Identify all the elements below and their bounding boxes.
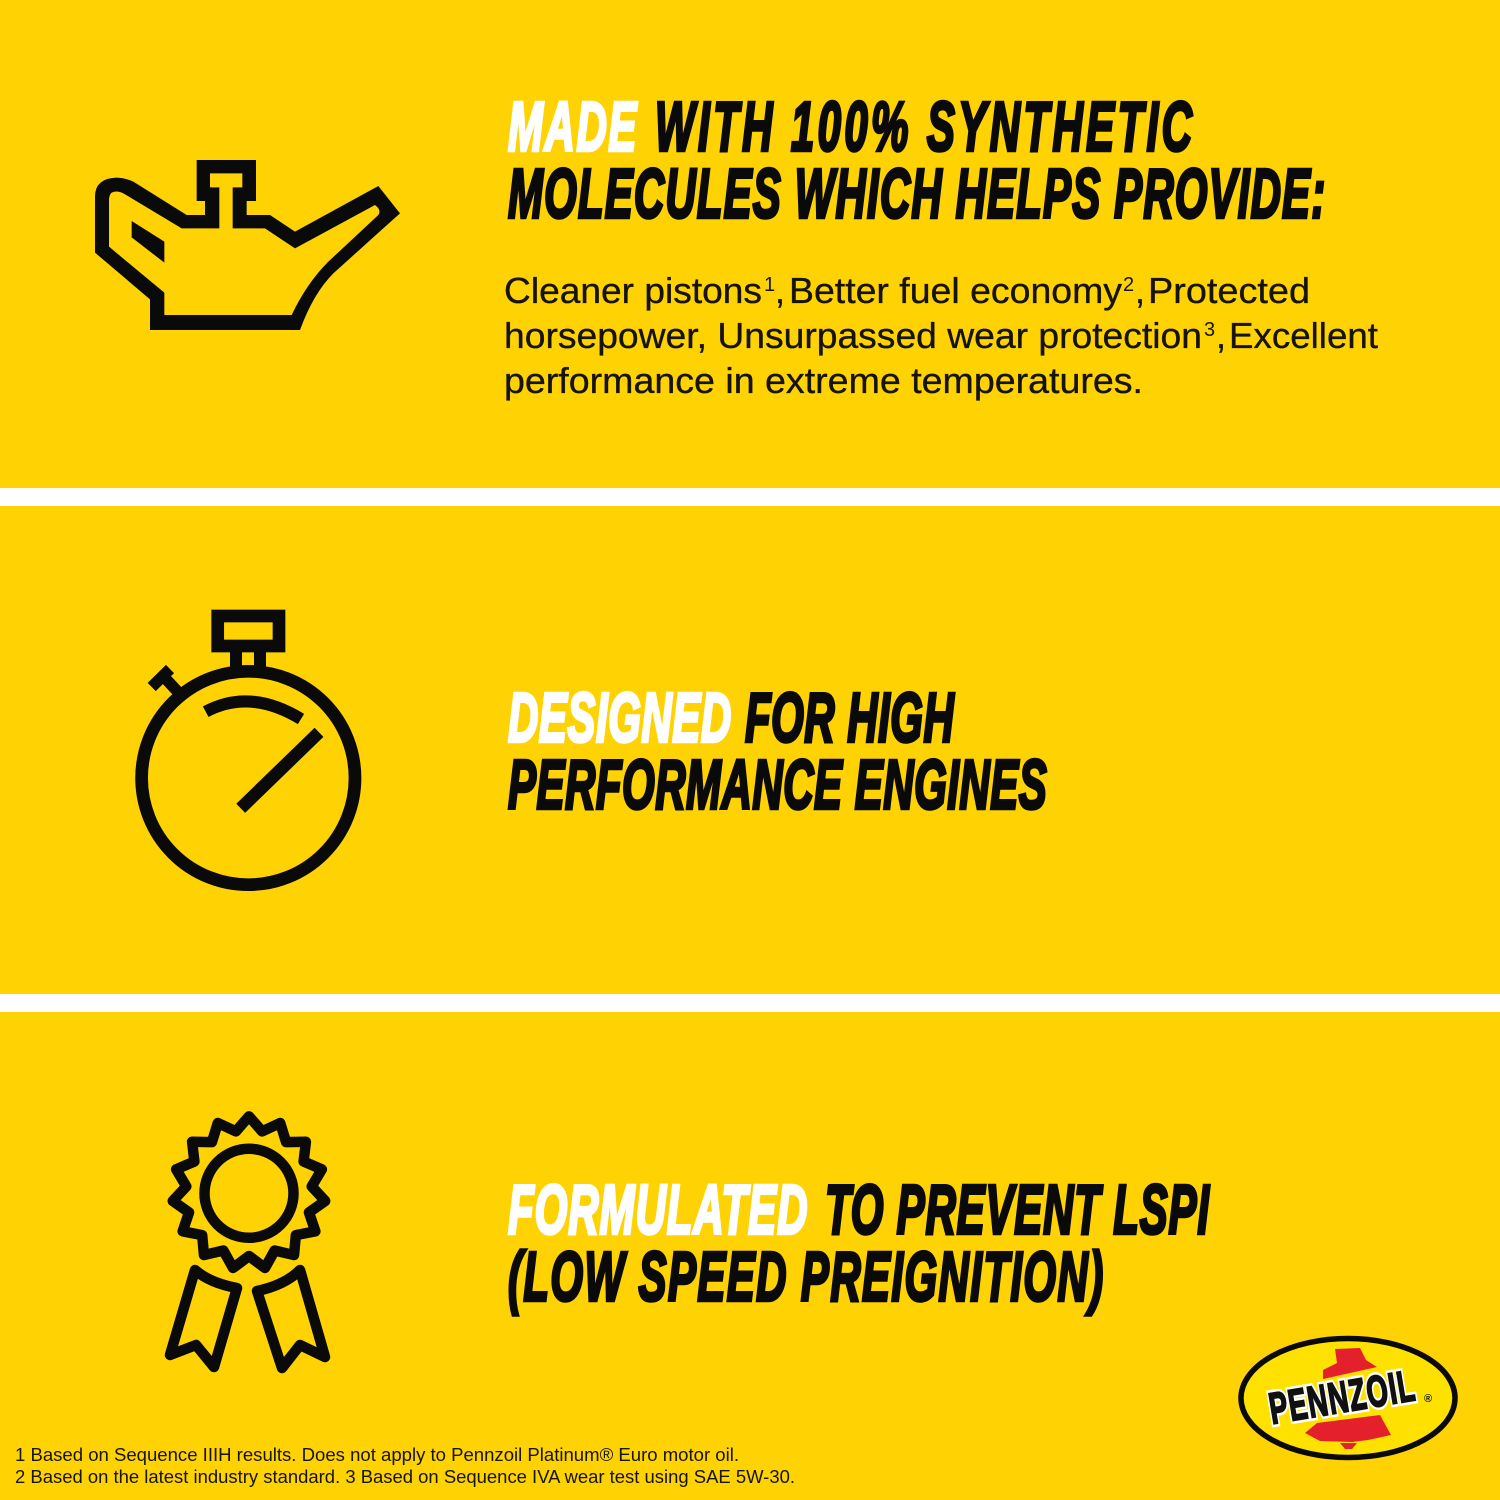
heading: made with 100% synthetic molecules: WITH 100% SYNTHETIC [655,89,1193,166]
text block: benefits list: performance in extreme temperatures. [504,360,1143,401]
heading: made with 100% synthetic molecules: MOLECULES WHICH HELPS PROVIDE: [508,156,1325,233]
heading: designed for high performance engines: PERFORMANCE ENGINES [508,747,1047,824]
text block: benefits list: 3 [1204,319,1215,341]
icon: stopwatch [142,616,355,885]
text block: benefits list: 1 [764,274,775,296]
text block: benefits list: , [1216,315,1226,356]
icon: oil can [95,160,400,330]
logo: Pennzoil: ® [1424,1393,1432,1405]
text block: benefits list: horsepower, Unsurpassed wear protection [504,315,1202,356]
text block: benefits list: , [1135,270,1145,311]
footnotes: 1 Based on Sequence IIIH results. Does not apply to Pennzoil Platinum® Euro motor oil. [15,1445,739,1465]
panel: formulated to prevent LSPI [0,1012,1500,1500]
footnotes [15,1445,795,1487]
text block: benefits list [504,270,1378,401]
heading: made with 100% synthetic molecules: MADE [508,89,637,166]
text block: benefits list: , [775,270,785,311]
heading: designed for high performance engines: FOR HIGH [745,680,955,757]
text block: benefits list: 2 [1123,274,1134,296]
text block: benefits list: Excellent [1229,315,1378,356]
text block: benefits list: Better fuel economy [789,270,1122,311]
logo: Pennzoil [1241,1338,1455,1458]
heading: formulated to prevent LSPI: TO PREVENT LSPI [825,1172,1210,1249]
heading: formulated to prevent LSPI: FORMULATED [508,1172,807,1249]
text block: benefits list: Protected [1148,270,1310,311]
heading: made with 100% synthetic molecules [508,89,1325,233]
icon: award ribbon [170,1116,325,1368]
logo: Pennzoil: PENNZOIL [1265,1361,1418,1433]
heading: formulated to prevent LSPI [508,1172,1210,1316]
footnotes: 2 Based on the latest industry standard. 3 Based on Sequence IVA wear test using SAE 5W-30. [15,1467,795,1487]
heading: designed for high performance engines: DESIGNED [508,680,731,757]
heading: designed for high performance engines [508,680,1047,824]
panel: synthetic molecules [0,0,1500,488]
panel: high performance engines [0,506,1500,994]
heading: formulated to prevent LSPI: (LOW SPEED PREIGNITION) [508,1239,1103,1316]
logo: Pennzoil: PENNZOIL [1265,1361,1418,1433]
text block: benefits list: Cleaner pistons [504,270,762,311]
